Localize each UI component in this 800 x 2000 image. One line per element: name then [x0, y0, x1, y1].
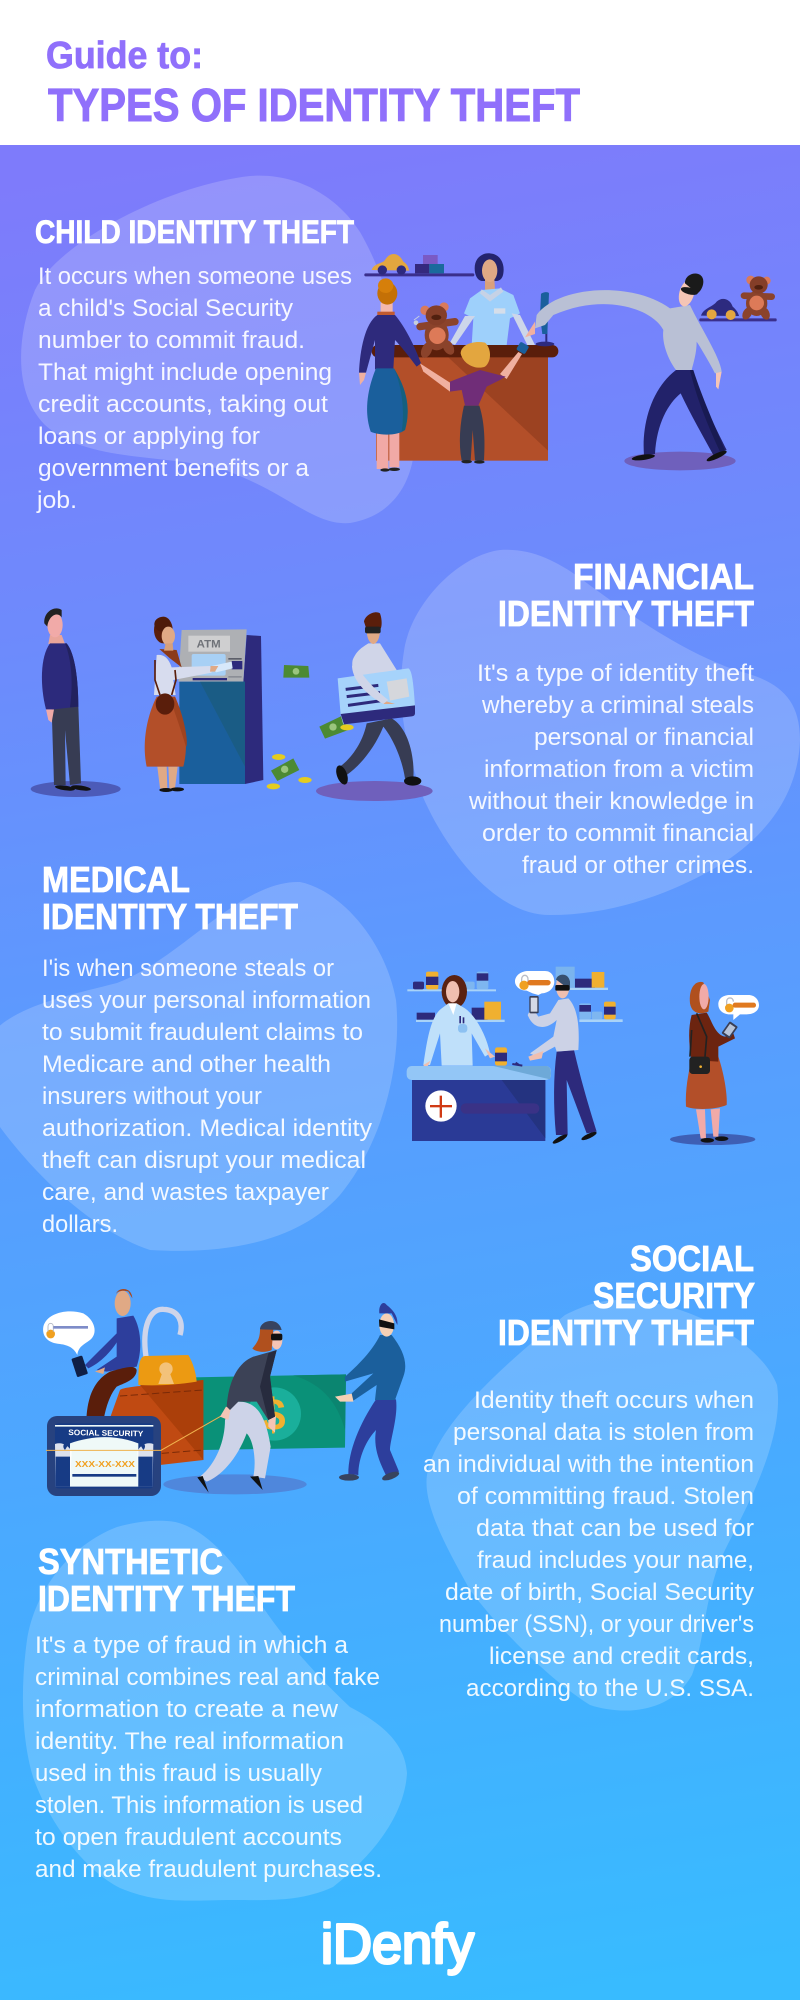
body text: social security identity theft: of committing fraud. Stolen	[457, 1483, 754, 1510]
thief with stretched arm	[525, 274, 736, 470]
blob: social security panel	[426, 1300, 778, 1711]
body text: financial identity theft: whereby a criminal steals	[481, 692, 754, 719]
woman with phone	[670, 982, 755, 1145]
body text: financial identity theft: personal or financial	[534, 724, 754, 751]
header band	[0, 0, 800, 145]
illustration: social security identity theft scene	[43, 1289, 405, 1496]
panel: social security identity theft text	[423, 1238, 755, 1702]
body text: medical identity theft: theft can disrupt your medical	[42, 1147, 366, 1174]
heading: medical identity theft: MEDICAL	[42, 859, 190, 900]
body text: financial identity theft: fraud or other crimes.	[522, 852, 754, 879]
body text: financial identity theft: without their knowledge in	[468, 788, 754, 815]
dollar sign: $	[261, 1389, 286, 1440]
blob: medical panel	[0, 882, 397, 1251]
counter with medical cross	[407, 1047, 551, 1141]
woman customer	[359, 278, 421, 472]
heading: medical identity theft	[42, 859, 298, 937]
child	[420, 341, 529, 464]
body text: financial identity theft: order to commit financial	[482, 820, 754, 847]
ATM machine	[178, 629, 263, 784]
thief carrying credit card	[316, 612, 433, 801]
body text: synthetic identity theft: used in this fraud is usually	[35, 1760, 323, 1787]
heading: social security identity theft: IDENTITY THEFT	[498, 1312, 754, 1353]
body text: medical identity theft: I'is when someone steals or	[42, 955, 334, 982]
blob: child panel	[21, 176, 415, 523]
body text: social security identity theft: personal data is stolen from	[453, 1419, 754, 1446]
body text: financial identity theft: It's a type of identity theft	[477, 660, 754, 687]
body text: social security identity theft: Identity theft occurs when	[474, 1387, 754, 1414]
card number: XXX-XX-XXX	[75, 1459, 135, 1469]
body text: social security identity theft: data that can be used for	[476, 1515, 754, 1542]
woman password bubble	[718, 995, 759, 1020]
body text: medical identity theft: dollars.	[42, 1211, 118, 1238]
pharmacy shelves	[407, 967, 623, 1022]
body text: child identity theft: It occurs when someone uses	[38, 263, 352, 290]
monitor	[536, 292, 554, 346]
illustration: child identity theft scene	[359, 253, 777, 472]
body text: social security identity theft: an individual with the intention	[423, 1451, 754, 1478]
body text: medical identity theft: authorization. Medical identity	[42, 1115, 373, 1142]
illustration: medical identity theft scene	[407, 967, 759, 1145]
heading: social security identity theft: SOCIAL	[630, 1238, 754, 1279]
body text: social security identity theft	[423, 1387, 755, 1702]
right toy shelf	[699, 276, 777, 321]
body text: child identity theft: job.	[36, 487, 77, 514]
body text: medical identity theft: to submit fraudulent claims to	[42, 1019, 363, 1046]
body text: medical identity theft: Medicare and other health	[42, 1051, 331, 1078]
illustration: financial identity theft scene	[31, 608, 433, 801]
heading: synthetic identity theft: SYNTHETIC	[38, 1541, 223, 1582]
logo: iDenfy: iDenfy	[321, 1912, 474, 1975]
body text: synthetic identity theft: and make fraudulent purchases.	[35, 1856, 382, 1883]
body text: medical identity theft: care, and wastes taxpayer	[42, 1179, 329, 1206]
panel: child identity theft text	[35, 214, 354, 514]
heading: synthetic identity theft	[38, 1541, 295, 1619]
body text: synthetic identity theft: identity. The real information	[35, 1728, 344, 1755]
card title: SOCIAL SECURITY	[68, 1428, 144, 1438]
heading: guide to: Guide to:	[46, 35, 203, 77]
body text: child identity theft: loans or applying for	[38, 423, 260, 450]
body text: medical identity theft	[42, 955, 373, 1238]
body text: synthetic identity theft	[35, 1632, 382, 1883]
body text: synthetic identity theft: to open fraudulent accounts	[35, 1824, 342, 1851]
heading: child identity theft: CHILD IDENTITY THEFT	[35, 214, 354, 250]
ATM label: ATM	[197, 639, 221, 651]
banknote	[193, 1374, 346, 1450]
man waiting	[31, 608, 121, 797]
body text: financial identity theft: information from a victim	[484, 756, 754, 783]
title: TYPES OF IDENTITY THEFT	[48, 79, 580, 131]
body text: social security identity theft: fraud includes your name,	[477, 1547, 754, 1574]
body text: child identity theft: a child's Social Security	[38, 295, 294, 322]
heading: financial identity theft: IDENTITY THEFT	[498, 593, 754, 634]
heading: financial identity theft	[498, 556, 754, 634]
panel: synthetic identity theft text	[35, 1541, 382, 1883]
flying money and coins	[267, 665, 354, 789]
panel: medical identity theft text	[42, 859, 373, 1238]
counter	[372, 345, 558, 461]
body text: medical identity theft: uses your personal information	[42, 987, 371, 1014]
body text: social security identity theft: number (SSN), or your driver's	[439, 1611, 754, 1638]
teddy bear on counter	[414, 302, 457, 360]
thief pulling card	[163, 1321, 307, 1494]
body text: synthetic identity theft: criminal combines real and fake	[35, 1664, 380, 1691]
body text: synthetic identity theft: stolen. This information is used	[35, 1792, 363, 1819]
nurse	[450, 253, 535, 345]
body text: financial identity theft	[468, 660, 754, 879]
body text: social security identity theft: according to the U.S. SSA.	[466, 1675, 754, 1702]
man's speech bubble	[43, 1311, 95, 1355]
body text: social security identity theft: date of birth, Social Security	[445, 1579, 755, 1606]
body text: synthetic identity theft: information to create a new	[35, 1696, 338, 1723]
panel: financial identity theft text	[468, 556, 754, 879]
heading: social security identity theft: SECURITY	[593, 1275, 755, 1316]
body text: child identity theft: That might include opening	[38, 359, 332, 386]
thief password bubble	[515, 971, 554, 995]
body text: child identity theft: number to commit fraud.	[38, 327, 305, 354]
woman at ATM	[145, 617, 233, 792]
body text: child identity theft	[36, 263, 352, 514]
heading: financial identity theft: FINANCIAL	[573, 556, 754, 597]
wallet and padlock	[103, 1309, 203, 1465]
masked thief with phone	[528, 975, 598, 1145]
heading: medical identity theft: IDENTITY THEFT	[42, 896, 298, 937]
thief pulling banknote	[335, 1303, 405, 1482]
body text: medical identity theft: insurers without your	[42, 1083, 262, 1110]
pharmacist	[423, 975, 495, 1069]
body text: social security identity theft: license and credit cards,	[489, 1643, 754, 1670]
man sitting on wallet	[71, 1289, 140, 1443]
body text: synthetic identity theft: It's a type of fraud in which a	[35, 1632, 348, 1659]
social security card	[46, 1416, 222, 1496]
body text: child identity theft: government benefits or a	[38, 455, 309, 482]
body text: child identity theft: credit accounts, taking out	[38, 391, 328, 418]
blob: synthetic panel	[23, 1521, 407, 1901]
heading: social security identity theft	[498, 1238, 755, 1353]
blob: financial panel	[401, 550, 800, 915]
left toy shelf	[364, 254, 474, 276]
heading: synthetic identity theft: IDENTITY THEFT	[38, 1578, 295, 1619]
